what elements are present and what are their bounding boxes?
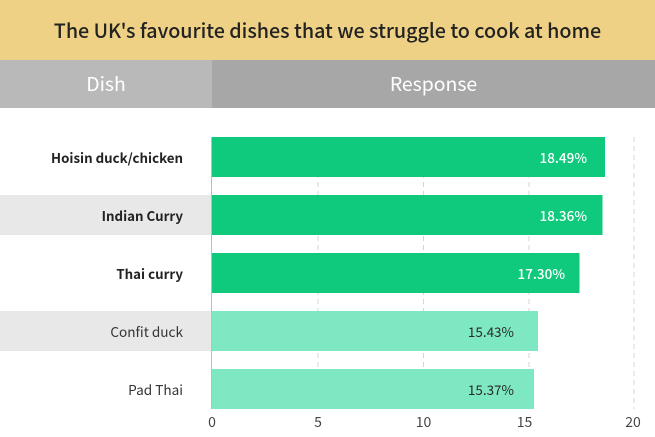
x axis labels: 15 [517, 412, 532, 432]
row highlight: Indian Curry [0, 195, 212, 235]
title: The UK's favourite dishes that we struggle to cook at home [54, 15, 601, 44]
label: Pad Thai: Pad Thai [128, 379, 183, 399]
column header: Response: Response [390, 68, 477, 97]
bar: Hoisin duck/chicken [212, 137, 605, 177]
label: Hoisin duck/chicken: Hoisin duck/chicken [51, 148, 183, 167]
bar: Indian Curry: 18.36% [540, 205, 587, 225]
label: Confit duck: Confit duck [110, 321, 183, 341]
bar: Pad Thai: 15.37% [468, 379, 514, 399]
x axis labels: 0 [208, 412, 216, 432]
bar: Pad Thai [212, 369, 534, 409]
bar: Thai curry: 17.30% [518, 263, 565, 283]
x axis labels [208, 412, 641, 432]
column header: Dish: Dish [86, 68, 126, 97]
bar: Hoisin duck/chicken: 18.49% [540, 147, 587, 167]
row highlight: Confit duck [0, 311, 212, 351]
column header: Response [212, 60, 655, 108]
x axis labels: 5 [314, 412, 322, 432]
bar: Thai curry [212, 253, 580, 293]
bar: Confit duck: 15.43% [468, 321, 514, 341]
column header: Dish [0, 60, 212, 108]
x axis labels: 20 [625, 412, 641, 432]
label: Indian Curry: Indian Curry [102, 206, 183, 225]
label: Thai curry: Thai curry [116, 264, 183, 283]
x axis labels: 10 [416, 412, 431, 432]
title [0, 0, 655, 60]
bar: Indian Curry [212, 195, 602, 235]
bar: Confit duck [212, 311, 538, 351]
